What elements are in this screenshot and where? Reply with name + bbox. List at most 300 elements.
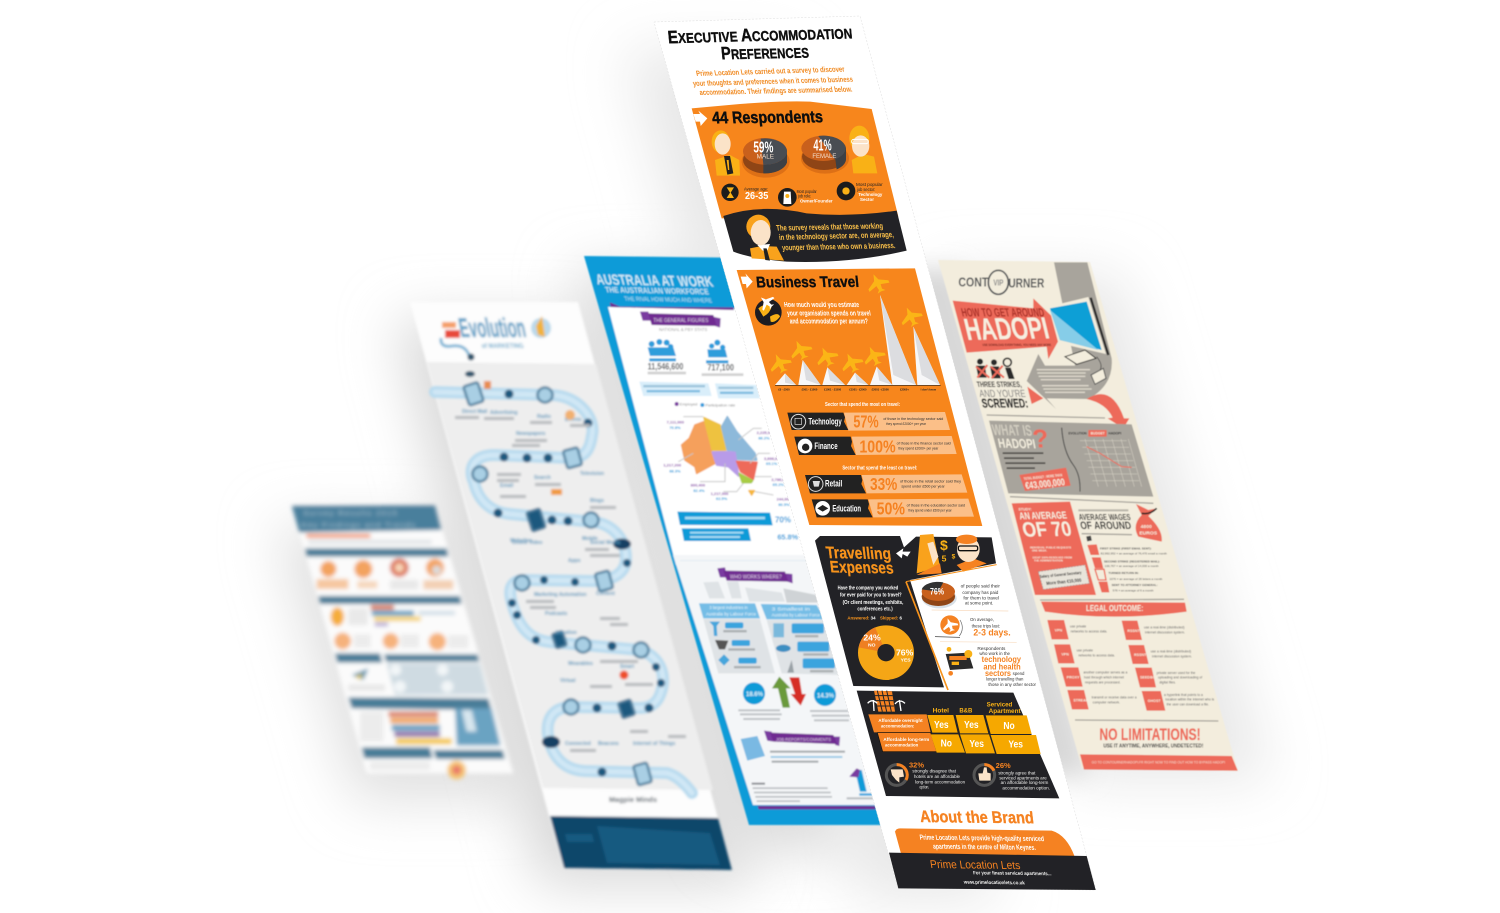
- donut chart 76 24: [858, 625, 914, 680]
- stats: 717,100: [707, 363, 734, 373]
- survey question: (Or client meetings, exhibits,: [843, 600, 904, 606]
- stat: 32 percent: option.: [919, 784, 929, 789]
- legal outcome items: [1047, 620, 1165, 711]
- panel: Australia at Work infographic: NATIONAL & PBY STATS: [659, 327, 707, 332]
- panel: what is hadopi: [989, 421, 1153, 497]
- panel: HADOPI infographic: digital files.: [1159, 680, 1176, 684]
- row: finance: of those in the finance sector said: [897, 440, 951, 445]
- panel: industries: [699, 603, 775, 673]
- arrow: [741, 273, 753, 288]
- stat: job sector: job sector:: [856, 187, 875, 192]
- panel: what is hadopi: ?: [1031, 424, 1050, 454]
- orange circles: [334, 633, 446, 650]
- panel: Australia at Work infographic: 1,217,200: [663, 463, 682, 468]
- heading: business travel: Business Travel: [755, 274, 860, 291]
- panel: Australia at Work infographic: 70.8%: [669, 425, 681, 430]
- text: trip length: these trips last:: [972, 623, 1000, 629]
- row: finance: Finance: [814, 441, 838, 451]
- row: technology: they spend £2000+ per year: [886, 421, 927, 426]
- intro text: [692, 65, 854, 97]
- chart: spend triangles: £2001 - £2500: [872, 387, 889, 391]
- panel: average of 70: EIGHT 100% RESOLVED FROM: [1033, 555, 1073, 559]
- survey question: for ever paid for you to travel?: [840, 593, 902, 599]
- text: three strikes: THREE STRIKES,: [976, 380, 1022, 389]
- comparison table: Yes: [969, 739, 984, 750]
- panel: HADOPI infographic: transmit or receive data over a: [1092, 696, 1137, 700]
- arrow: [896, 548, 911, 558]
- header band: Key Findings and Trends: [302, 521, 415, 530]
- male pie: [742, 138, 790, 178]
- comparison table: No: [1003, 721, 1015, 732]
- banner: general figures: THE GENERAL FIGURES: [653, 318, 709, 324]
- male pie: 59%: [753, 140, 774, 157]
- text: paid for travel: company has paid: [962, 590, 999, 596]
- panel: Australia at Work infographic: 3,696,000: [764, 456, 783, 461]
- comparison table: accommodation:: [881, 723, 915, 729]
- icon: plane circle: [935, 615, 962, 637]
- road labels: Social Media: [590, 540, 621, 546]
- bar chart: [388, 712, 452, 744]
- chart: spend triangles: £2500+: [900, 387, 909, 391]
- dark footer: Prime Location Lets: [929, 859, 1021, 872]
- row: education: of those in the education sector said: [907, 503, 965, 508]
- callout text: younger than those who own a business.: [781, 241, 896, 252]
- chart: spend triangles: [766, 270, 941, 391]
- text: three strikes: AND YOU'RE: [978, 389, 1027, 400]
- panel: blurred survey infographic (far left): [292, 504, 513, 779]
- panel: Australia at Work infographic: 60.5%: [778, 502, 790, 507]
- row: education: they spend under £500 per year: [908, 508, 952, 513]
- icon: building and palms: [868, 691, 905, 712]
- footer: [550, 816, 732, 870]
- panel: HADOPI infographic: private server used for the: [1157, 671, 1195, 675]
- row: retail: 33%: [870, 474, 897, 494]
- legal outcome banner: LEGAL OUTCOME:: [1086, 603, 1143, 613]
- panel: average of 70: THE ADMINISTRATION: [1034, 559, 1063, 563]
- row: retail: spend under £500 per year: [901, 483, 945, 488]
- title: [594, 272, 715, 304]
- orange panel: [737, 268, 982, 526]
- brand panel: Prime Location Lets provide high-quality serviced: [919, 833, 1045, 843]
- stat: job sector: Most popular: [856, 182, 883, 187]
- chart: spend triangles: £1501 - £2000: [849, 387, 867, 391]
- panel: HADOPI infographic: [938, 260, 1238, 771]
- icon: monitor: [946, 647, 973, 676]
- average wages: [1078, 509, 1132, 535]
- road labels: Newspapers: [516, 431, 546, 437]
- comparison table: Affordable overnight: [878, 718, 923, 724]
- brand panel: [895, 828, 1075, 857]
- pie 76 percent: 76%: [930, 587, 945, 597]
- road labels: Apps: [568, 558, 581, 564]
- dark comparison panel: [857, 691, 1059, 798]
- road labels: Virtual: [560, 678, 576, 684]
- road labels: Television: [580, 471, 604, 477]
- blue stat bars: 70%: [775, 516, 791, 525]
- panel: average of 70: Salary of General Secretary: [1039, 570, 1082, 579]
- stat: 26 percent: [974, 761, 1050, 790]
- comparison table: No: [941, 739, 952, 750]
- road labels: Podcasts: [545, 611, 567, 617]
- icon: money bag: 4800: [1141, 524, 1152, 530]
- sheet blue border: [584, 256, 910, 825]
- chart: spend triangles: £0 - £500: [778, 387, 790, 391]
- road labels: Websites: [510, 538, 532, 544]
- road labels: [462, 409, 675, 747]
- comparison table: [868, 714, 1041, 754]
- road labels: Beacons: [598, 741, 619, 747]
- panel: average of 70: INDIVIDUAL PUBLIC REQUESTS: [1030, 545, 1071, 549]
- chart: spend triangles: £501 - £1000: [802, 387, 818, 391]
- strike list: SENT TO ATTORNEY GENERAL:: [1112, 583, 1158, 587]
- banner: who works where: [717, 567, 793, 583]
- icon: female figure: [849, 126, 877, 173]
- stat: 26 percent: accommodation option.: [1002, 785, 1050, 790]
- banner: job reports: [764, 731, 840, 746]
- stat: 32 percent: [886, 760, 966, 789]
- text: trip length: On average,: [970, 617, 994, 623]
- text: three strikes: [976, 380, 1029, 410]
- panel: HADOPI infographic: requests are processed.: [1085, 680, 1121, 684]
- intro text: your thoughts and preferences when it comes to business: [692, 75, 854, 88]
- answered skipped: [847, 616, 902, 621]
- section: business travel: [737, 268, 982, 526]
- legal outcome banner: [1041, 602, 1187, 617]
- row: retail: Retail: [825, 479, 842, 489]
- row: retail: of those in the retail sector said they: [900, 479, 961, 484]
- text: longer trips: sectors: [985, 668, 1011, 678]
- icons: three strikes figures: [976, 358, 1015, 379]
- road labels: Advertising: [490, 410, 518, 416]
- stats: [648, 361, 743, 376]
- no limitations: USE IT ANYTIME, ANYWHERE, UNDETECTED!: [1103, 743, 1203, 749]
- text: trip length: [970, 617, 1011, 637]
- dark footer: For your finest serviced apartments...: [973, 870, 1052, 877]
- logo: URNER: [1008, 276, 1044, 290]
- panel: Australia at Work infographic: [584, 256, 915, 825]
- arrow: [693, 111, 707, 126]
- map legend: Participation rate: [705, 403, 736, 408]
- city illustration: [455, 708, 501, 746]
- strike list: [1086, 536, 1167, 592]
- illustration: people and money: $: [952, 553, 956, 560]
- icon: man portrait: [746, 215, 784, 261]
- strike list: 82,992,952 = an average of 76,470 email a month: [1101, 551, 1167, 555]
- sheet background: [938, 260, 1238, 771]
- small orange accents: [484, 381, 628, 680]
- donut chart 76 24: 76%: [896, 647, 914, 657]
- heading: about the brand: About the Brand: [919, 807, 1035, 827]
- logo: [958, 270, 1044, 294]
- illustration: people and money: 5: [942, 554, 947, 564]
- comparison table: Yes: [934, 720, 949, 731]
- heading: travelling expenses: Expenses: [829, 557, 894, 578]
- answered skipped: Skipped: 6: [880, 616, 902, 621]
- panel: HADOPI infographic: use private: [1070, 624, 1086, 628]
- stat: job role: [778, 188, 833, 207]
- small text in grey arrow: [1037, 369, 1092, 393]
- row: education: 50%: [877, 498, 905, 518]
- panel: HADOPI infographic: PROXY: [1067, 676, 1080, 680]
- text: longer trips: longer travelling than: [986, 676, 1024, 681]
- panel: Australia at Work infographic: 65.2%: [773, 482, 784, 487]
- panel: HADOPI infographic: SEEDBOX: [1140, 676, 1158, 680]
- road labels: Search: [534, 475, 551, 481]
- panel: Australia at Work infographic: 2,786,000: [771, 477, 790, 482]
- donut chart 76 24: 24%: [863, 633, 881, 643]
- comparison table: Affordable long-term: [883, 737, 930, 743]
- logo: CONT: [958, 275, 988, 290]
- stat: average age: 26-35: [745, 191, 769, 202]
- banner: who works where: WHO WORKS WHERE?: [730, 575, 782, 581]
- stat: 26 percent: 26%: [996, 761, 1011, 770]
- road labels: Direct Mail: [462, 409, 488, 415]
- panel: HADOPI infographic: STREAM: [1073, 698, 1089, 702]
- banner: general figures: [640, 312, 721, 328]
- dark footer: [889, 853, 1096, 890]
- dark callout: [723, 209, 907, 262]
- icons: people: [648, 339, 728, 363]
- stat: average age: [721, 184, 769, 202]
- female pie: 41%: [813, 138, 832, 155]
- text: longer trips: and health: [983, 661, 1021, 671]
- section: travelling expenses and brand: [815, 534, 1096, 890]
- heading: travelling expenses: [825, 543, 894, 578]
- stat: average age: Average age:: [744, 186, 768, 191]
- road labels: Content: [596, 591, 615, 597]
- illustration: people and money: [917, 534, 987, 575]
- header band: [292, 505, 442, 532]
- heading: travelling expenses: Travelling: [825, 543, 892, 563]
- stat: job sector: Technology: [858, 192, 883, 197]
- donut chart 76 24: NO: [868, 643, 876, 649]
- stat: 26 percent: an affordable long-term: [1001, 780, 1049, 785]
- stat: job role: job role:: [797, 194, 811, 199]
- growth stats: [738, 677, 850, 721]
- comparison table: Yes: [1008, 740, 1023, 751]
- table headers: Serviced: [987, 702, 1012, 709]
- red arrows: [1027, 387, 1043, 404]
- callout text: in the technology sector are, on average,: [778, 230, 894, 242]
- panel: HADOPI infographic: RSSNT: [1127, 629, 1140, 633]
- row: technology: [787, 412, 950, 432]
- line chart: [1062, 428, 1142, 492]
- male pie: MALE: [757, 154, 775, 161]
- no limitations: [1099, 725, 1203, 749]
- panel: average of 70: [1012, 502, 1096, 595]
- donut chart 76 24: YES: [901, 657, 911, 663]
- stat: job sector: [837, 182, 883, 202]
- icon: globe and plane: [755, 291, 782, 326]
- chart: spend triangles: £1001 - £1500: [824, 387, 842, 391]
- row: finance: 100%: [859, 436, 896, 456]
- icon: document: [741, 736, 765, 761]
- panel: HADOPI infographic: use private: [1077, 649, 1093, 653]
- growth stats: 18.6%: [746, 692, 764, 698]
- row: finance: [794, 436, 957, 456]
- panel: HADOPI infographic: RSSNT: [1134, 653, 1147, 657]
- red title arrow: USE DOWNLOAD EVERYTHING, YOU NEED ANY MORE: [982, 343, 1052, 347]
- blue-grey panel: [387, 663, 488, 695]
- text: paid for travel: of people said their: [961, 583, 1000, 589]
- panel: HADOPI infographic: VPN: [1061, 652, 1069, 656]
- average wages: OF AROUND: [1079, 520, 1132, 532]
- text: longer trips: who work in the: [979, 651, 1010, 657]
- title: Evolution of Marketing: Evolution: [456, 312, 528, 343]
- orange border line: [906, 565, 997, 582]
- number one graphic: [847, 768, 873, 799]
- stats: 11,546,600: [648, 361, 683, 371]
- road labels: Internet of Things: [633, 741, 675, 747]
- sheet background: [654, 16, 1096, 890]
- panel: HADOPI infographic: internet discussion system.: [1152, 654, 1192, 658]
- intro text: accommodation. Their findings are summarised below.: [699, 85, 853, 97]
- table headers: Apartment: [989, 708, 1022, 715]
- panel: Australia at Work infographic: 244,000: [777, 497, 792, 502]
- stat: job sector: Sector: [860, 197, 874, 202]
- text: paid for travel: [961, 583, 1000, 606]
- panel: industries: 3 largest industries in: [709, 605, 748, 610]
- text: paid for travel: at some point.: [965, 600, 993, 606]
- red title arrow: HADOPI: [961, 311, 1052, 347]
- road: [435, 392, 692, 793]
- heading: least on travel: Sector that spend the least on travel:: [842, 465, 917, 471]
- panel: HADOPI infographic: use a real-time (distributed): [1144, 625, 1185, 629]
- strike list: 1076 = an average of 26 letters a month: [1109, 577, 1163, 581]
- road labels: Email: [500, 483, 514, 489]
- stat: job role: Owner/Founder: [800, 199, 833, 204]
- table headers: B&B: [959, 707, 973, 714]
- strike list: 576 = an average of 6 a month: [1113, 588, 1154, 592]
- panel: what is hadopi: HADOPI: [997, 436, 1037, 451]
- stat: 32 percent: hotels are an affordable: [914, 774, 961, 779]
- row: retail: [805, 474, 967, 494]
- panel: HADOPI infographic: VPN: [1055, 628, 1063, 632]
- map of Australia: [682, 417, 757, 495]
- growth stats: 14.3%: [817, 694, 835, 700]
- panel: HADOPI infographic: networks to access data.: [1071, 630, 1107, 634]
- callout text: The survey reveals that those working: [776, 222, 884, 233]
- title: EXECUTIVE ACCOMMODATION: [667, 22, 853, 47]
- soft background shadows: [275, 50, 1270, 900]
- text: longer trips: those in any other sector: [988, 682, 1036, 687]
- illustration: people and money: $: [940, 537, 948, 553]
- stat: 26 percent: strongly agree that: [998, 770, 1036, 775]
- panel: HADOPI infographic: use a real-time (distributed): [1151, 650, 1191, 654]
- road labels: Radio: [537, 414, 551, 420]
- panel: HADOPI infographic: location within the internet who is: [1165, 698, 1215, 702]
- header band: Survey Results 2015: [303, 509, 397, 518]
- red title arrow: [953, 298, 1065, 359]
- row: technology: Technology: [808, 417, 842, 427]
- blue stat bars: 65.8%: [777, 532, 799, 541]
- map legend: Employed: [680, 402, 697, 407]
- answered skipped: Answered: 34: [847, 616, 876, 621]
- row: finance: they spend £2000+ per year: [898, 445, 939, 450]
- panel: Australia at Work infographic: 800,400: [691, 483, 706, 488]
- survey question: How much would you estimate: [783, 300, 860, 309]
- icon: money bag: EUROS: [1139, 530, 1158, 536]
- stat: 26 percent: serviced apartments are: [999, 775, 1047, 780]
- panel: HADOPI infographic: host through which internet: [1084, 675, 1124, 679]
- text: three strikes: SCREWED:: [980, 395, 1029, 410]
- strike list: TURNED RETURN IN:: [1108, 571, 1139, 575]
- panel: employers: 3 Smallest in: [772, 606, 811, 611]
- panel: average of 70: OF 70: [1020, 518, 1074, 542]
- skyline: [703, 582, 725, 598]
- sheet background: [292, 504, 513, 773]
- chart: spend triangles: I don't know: [921, 387, 937, 391]
- stat: 32 percent: 32%: [909, 760, 924, 769]
- line chart: HADOPI: [1108, 432, 1121, 436]
- panel: Australia at Work infographic: 62.5%: [716, 496, 728, 501]
- panel: HADOPI infographic: internet discussion system.: [1145, 630, 1185, 634]
- row: education: [812, 498, 974, 518]
- stat: 32 percent: strongly disagree that: [912, 769, 957, 774]
- panel: Australia at Work infographic: 62.4%: [693, 488, 705, 493]
- panel: blurred Evolution of Marketing road infographic: [410, 302, 732, 870]
- red title arrow: HOW TO GET AROUND: [960, 306, 1046, 320]
- line chart: EVOLUTION: [1068, 432, 1087, 436]
- road milestones: [463, 382, 652, 785]
- road labels: Events: [565, 417, 582, 423]
- panel: Australia at Work infographic: 1,217,000: [711, 491, 729, 496]
- road labels: Wearables: [568, 661, 593, 667]
- orange panel: [692, 101, 898, 218]
- title: THE AUSTRALIAN WORKFORCE: [604, 285, 710, 296]
- intro text: Prime Location Lets carried out a survey to discover: [695, 65, 845, 78]
- title: AUSTRALIA AT WORK: [594, 272, 715, 291]
- callout text: [776, 222, 896, 252]
- text: longer trips: spend: [1013, 671, 1025, 676]
- panel: HADOPI infographic: computer network.: [1093, 700, 1120, 704]
- text: longer trips: Respondents: [977, 646, 1006, 652]
- text: paid for travel: for them to travel: [963, 596, 999, 602]
- row: technology: of those in the technology sector said: [883, 416, 943, 421]
- panel: Australia at Work infographic: 68.3%: [669, 468, 681, 473]
- blue stat bars: [677, 512, 799, 541]
- strike list: FIRST STRIKE (FIRST EMAIL SENT):: [1100, 546, 1152, 550]
- female pie: FEMALE: [812, 153, 837, 160]
- survey question: [838, 585, 904, 613]
- road labels: Connected: [565, 741, 591, 747]
- red footer: GO TO CONTOURNERHADOPI.FR RIGHT NOW TO FIND OUT HOW TO BYPASS HADOPI: [1092, 761, 1225, 765]
- panel: what is hadopi: €43,000,000: [1024, 477, 1066, 492]
- title: THE RIVAL HOW MUCH AND WHERE: [624, 296, 713, 304]
- panel: HADOPI infographic: uploading and downloading of: [1158, 676, 1202, 680]
- comparison table: Yes: [964, 720, 979, 731]
- panel: HADOPI infographic: a hyperlink that points to a: [1164, 693, 1203, 697]
- panel: what is hadopi: TOTAL BUDGET : MORE THAN: [1023, 473, 1063, 481]
- icon: male figure: [712, 130, 740, 176]
- orange icons row: [320, 558, 444, 578]
- brand panel: apartments in the centre of Milton Keynes.: [932, 842, 1036, 852]
- logo: VIP: [993, 279, 1004, 288]
- small grey captions: [455, 416, 686, 752]
- panel: Australia at Work infographic: 66.2%: [758, 435, 770, 440]
- comparison table: accommodation: [885, 743, 918, 749]
- panel: average of 70: ONE WEEK.: [1032, 549, 1047, 553]
- road nodes: [494, 390, 665, 776]
- panel: employers: Australia by Labour Force: [772, 613, 821, 618]
- dark footer: www.primelocationlets.co.uk: [963, 880, 1025, 886]
- survey question: conferences etc.): [857, 607, 893, 613]
- text: longer trips: [977, 646, 1036, 687]
- grey road area: [427, 362, 713, 790]
- map labels: [678, 417, 773, 495]
- road labels: Online Video: [512, 540, 542, 546]
- heading: most on travel: Sector that spend the most on travel:: [825, 402, 900, 408]
